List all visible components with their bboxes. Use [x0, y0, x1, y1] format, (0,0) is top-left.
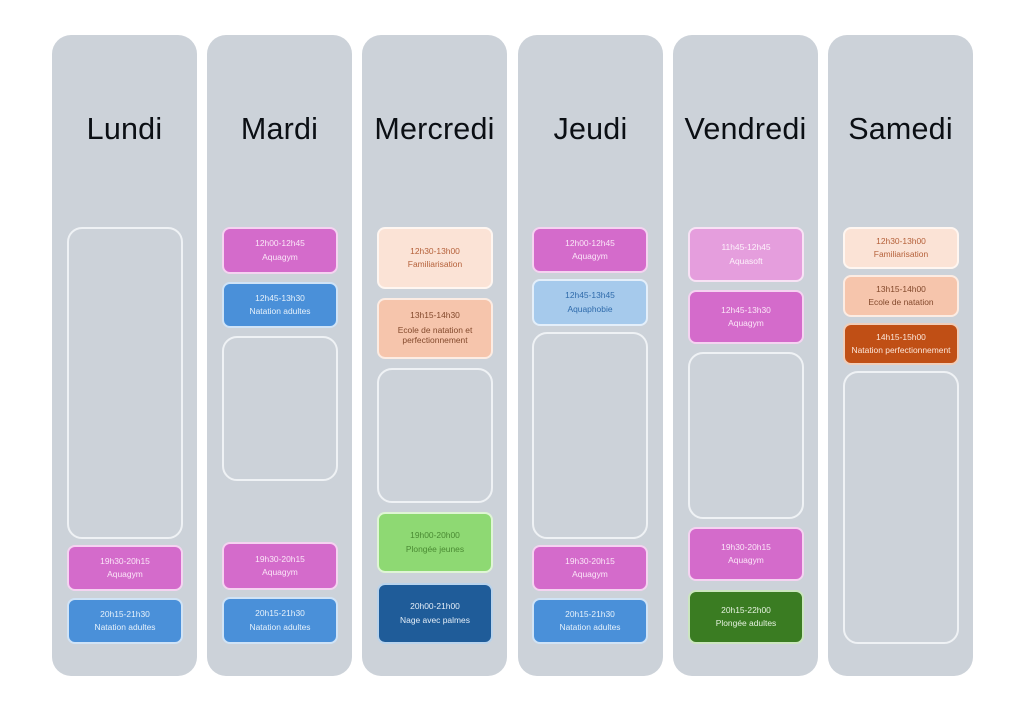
empty slot — [377, 368, 493, 503]
panel: Lundi — [52, 35, 197, 676]
session: Natation perfectionnement — [843, 323, 959, 365]
session: Ecole de natation et perfectionnement: perfectionnement — [402, 335, 468, 345]
session: Natation adultes midi: Natation adultes — [250, 306, 310, 316]
session: Plongée adultes: Plongée adultes — [716, 618, 776, 628]
session: Ecole de natation et perfectionnement: 13h15-14h30 — [410, 310, 460, 320]
session: Aquasoft — [688, 227, 804, 282]
session: Plongée jeunes — [377, 512, 493, 573]
heading: Lundi: Lundi — [87, 112, 162, 146]
session: Ecole de natation et perfectionnement: Ecole de natation et — [398, 325, 472, 335]
session: Natation adultes: 20h15-21h30 — [100, 608, 150, 618]
session: Aquasoft: 11h45-12h45 — [721, 242, 771, 252]
session: Nage avec palmes: 20h00-21h00 — [410, 601, 460, 611]
session: Aquagym soir: Aquagym — [572, 569, 608, 579]
session: Ecole de natation et perfectionnement — [377, 298, 493, 359]
panel: Vendredi — [673, 35, 818, 676]
heading: Mercredi: Mercredi — [374, 112, 495, 146]
session: Familiarisation: Familiarisation — [408, 259, 462, 269]
session: Aquagym soir: 19h30-20h15 — [721, 542, 771, 552]
panel: Mercredi — [362, 35, 507, 676]
session: Familiarisation — [377, 227, 493, 289]
session: Plongée jeunes: 19h00-20h00 — [410, 530, 460, 540]
session: Aquagym soir: 19h30-20h15 — [255, 554, 305, 564]
session: Familiarisation — [843, 227, 959, 269]
session: Plongée adultes: 20h15-22h00 — [721, 604, 771, 614]
session: Aquagym midi — [532, 227, 648, 273]
session: Natation adultes: 20h15-21h30 — [565, 608, 615, 618]
session: Aquagym: 19h30-20h15 — [100, 556, 150, 566]
session: Plongée adultes — [688, 590, 804, 644]
session: Aquagym midi: Aquagym — [262, 252, 298, 262]
session: Aquagym soir: Aquagym — [262, 567, 298, 577]
session: Aquagym midi: 12h00-12h45 — [255, 238, 305, 248]
session: Aquagym soir — [688, 527, 804, 581]
session: Aquagym midi — [688, 290, 804, 344]
session: Ecole de natation: 13h15-14h00 — [876, 284, 926, 294]
session: Aquagym — [67, 545, 183, 591]
panel: Mardi — [207, 35, 352, 676]
session: Natation adultes — [67, 598, 183, 644]
empty slot — [688, 352, 804, 519]
heading: Mardi: Mardi — [241, 112, 318, 146]
session: Natation adultes soir: 20h15-21h30 — [255, 608, 305, 618]
panel: Samedi — [828, 35, 973, 676]
session: Aquagym midi: 12h45-13h30 — [721, 304, 771, 314]
session: Aquagym midi: Aquagym — [572, 251, 608, 261]
session: Familiarisation: Familiarisation — [874, 249, 928, 259]
session: Ecole de natation — [843, 275, 959, 317]
empty slot — [843, 371, 959, 644]
session: Natation perfectionnement: 14h15-15h00 — [876, 332, 926, 342]
session: Aquaphobie: 12h45-13h45 — [565, 290, 615, 300]
session: Aquagym midi: Aquagym — [728, 318, 764, 328]
session: Nage avec palmes: Nage avec palmes — [400, 614, 470, 624]
session: Aquaphobie — [532, 279, 648, 326]
session: Aquasoft: Aquasoft — [729, 256, 763, 266]
session: Familiarisation: 12h30-13h00 — [876, 236, 926, 246]
session: Natation perfectionnement: Natation perfectionnement — [852, 345, 950, 355]
session: Nage avec palmes — [377, 583, 493, 644]
session: Natation adultes soir — [222, 597, 338, 644]
heading: Vendredi: Vendredi — [684, 112, 806, 146]
session: Aquagym midi — [222, 227, 338, 274]
session: Ecole de natation: Ecole de natation — [868, 297, 934, 307]
session: Aquagym soir — [532, 545, 648, 591]
empty slot — [222, 336, 338, 481]
session: Natation adultes midi: 12h45-13h30 — [255, 292, 305, 302]
panel: Jeudi — [518, 35, 663, 676]
session: Natation adultes — [532, 598, 648, 644]
session: Natation adultes: Natation adultes — [94, 622, 155, 632]
heading: Jeudi: Jeudi — [554, 112, 627, 146]
session: Aquagym midi: 12h00-12h45 — [565, 238, 615, 248]
heading: Samedi: Samedi — [848, 112, 953, 146]
session: Aquagym: Aquagym — [107, 569, 143, 579]
session: Plongée jeunes: Plongée jeunes — [406, 544, 464, 554]
session: Aquagym soir: 19h30-20h15 — [565, 556, 615, 566]
empty slot — [67, 227, 183, 539]
session: Aquagym soir: Aquagym — [728, 555, 764, 565]
session: Natation adultes soir: Natation adultes — [250, 622, 310, 632]
empty slot — [532, 332, 648, 539]
session: Aquagym soir — [222, 542, 338, 590]
session: Natation adultes midi — [222, 282, 338, 328]
session: Aquaphobie: Aquaphobie — [567, 304, 613, 314]
session: Familiarisation: 12h30-13h00 — [410, 246, 460, 256]
session: Natation adultes: Natation adultes — [560, 622, 620, 632]
